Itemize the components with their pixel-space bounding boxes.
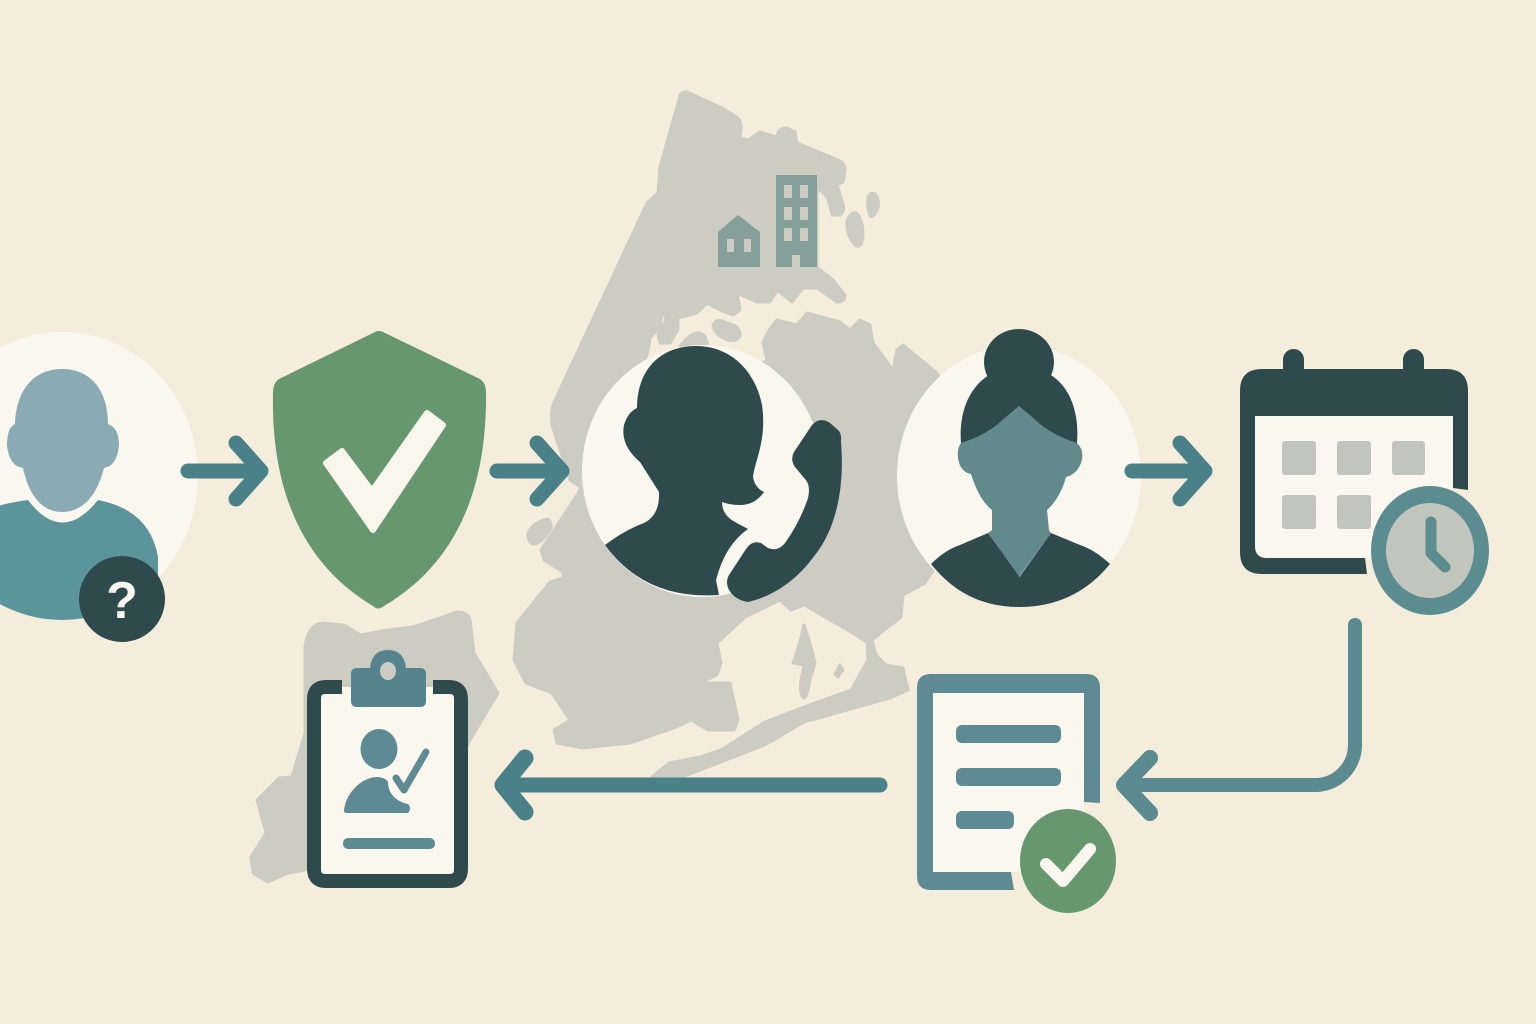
icon: house <box>718 215 760 267</box>
icon: care worker woman <box>897 329 1141 607</box>
clipboard board <box>313 687 462 882</box>
arrow: document to clipboard <box>503 758 880 812</box>
woman backdrop circle <box>897 345 1141 607</box>
arrow: calendar to document <box>1124 625 1355 813</box>
neck and face <box>958 400 1082 577</box>
handset <box>727 420 842 602</box>
person figure <box>0 369 158 640</box>
agent silhouette <box>605 346 764 595</box>
person backdrop circle <box>0 332 198 620</box>
clipboard person <box>344 729 410 813</box>
icon: clipboard with person <box>313 650 462 882</box>
calendar frame <box>1240 369 1468 574</box>
icon: document with check <box>917 674 1116 913</box>
agent backdrop circle <box>582 345 822 597</box>
arrow: shield to phone agent <box>497 443 562 499</box>
map: city silhouette <box>514 92 1000 777</box>
map: lower-left island <box>251 612 498 882</box>
calendar page <box>1255 416 1453 558</box>
question badge <box>79 556 165 642</box>
icon: phone agent <box>582 345 842 602</box>
document frame <box>917 674 1100 890</box>
clipboard tick <box>396 752 426 790</box>
icon: person with question <box>0 332 198 642</box>
arrow: person to shield <box>188 443 261 499</box>
arrow: care worker to calendar <box>1132 443 1205 499</box>
calendar date cells <box>1282 441 1425 529</box>
shoulders <box>931 533 1110 607</box>
calendar rings <box>1283 349 1424 383</box>
icon: buildings on map <box>718 175 817 267</box>
question badge: ? <box>106 572 138 630</box>
icon: calendar with clock <box>1240 349 1489 615</box>
icon: green shield with check <box>273 331 486 608</box>
hair and bun <box>961 329 1077 443</box>
check badge <box>1020 809 1116 913</box>
icon: apartment block <box>776 175 817 267</box>
document sheet <box>933 693 1084 872</box>
clipboard clip <box>351 650 426 707</box>
clipboard line <box>343 838 435 849</box>
clock <box>1371 486 1489 615</box>
document text lines <box>956 725 1061 829</box>
